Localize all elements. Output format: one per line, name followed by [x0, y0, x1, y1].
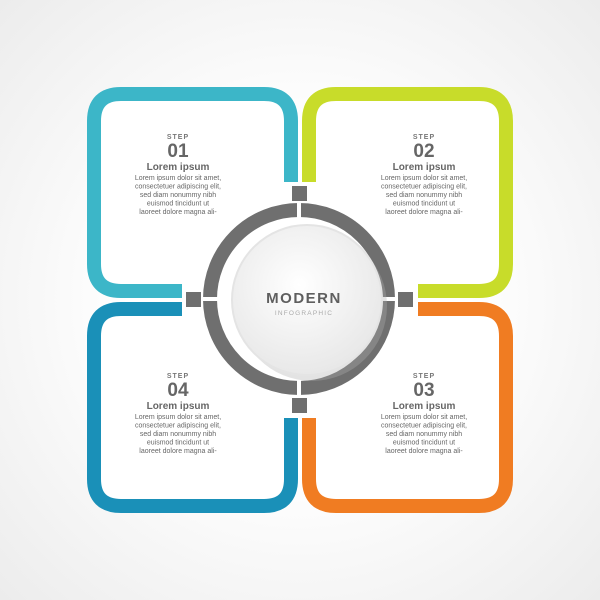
panel: step 01: Lorem ipsum: [147, 162, 209, 173]
panel: step 02: euismod tincidunt ut: [393, 200, 455, 208]
panel: step 04: Lorem ipsum dolor sit amet,: [135, 414, 221, 421]
panel: step 03: sed diam nonummy nibh: [386, 431, 462, 438]
panel: step 01: sed diam nonummy nibh: [140, 192, 216, 199]
panel: step 04: 04: [167, 380, 189, 401]
panel: step 01: [87, 87, 298, 298]
center circle: MODERN: [266, 290, 342, 307]
panel: step 04: euismod tincidunt ut: [147, 440, 209, 446]
panel: step 01: 01: [167, 141, 189, 162]
panel: step 01: STEP: [167, 134, 189, 141]
panel: step 04: consectetuer adipiscing elit,: [135, 422, 221, 430]
panel: step 02: STEP: [413, 134, 435, 141]
center circle: [232, 225, 387, 381]
panel: step 03: laoreet dolore magna ali-: [385, 448, 463, 455]
panel: step 02: Lorem ipsum: [393, 162, 455, 173]
panel: step 02: 02: [413, 141, 435, 162]
panel: step 02: Lorem ipsum dolor sit amet,: [381, 175, 467, 182]
panel: step 04: sed diam nonummy nibh: [140, 431, 216, 438]
panel: step 03: euismod tincidunt ut: [393, 440, 455, 446]
panel: step 03: 03: [413, 380, 435, 401]
panel: step 02: consectetuer adipiscing elit,: [381, 184, 467, 190]
panel: step 02: laoreet dolore magna ali-: [385, 209, 463, 216]
center circle: INFOGRAPHIC: [275, 310, 333, 317]
panel: step 03: Lorem ipsum dolor sit amet,: [381, 414, 467, 421]
panel: step 04: Lorem ipsum: [147, 401, 209, 412]
panel: step 02: sed diam nonummy nibh: [386, 192, 462, 199]
panel: step 04: STEP: [167, 373, 189, 380]
panel: step 04: [87, 302, 298, 513]
gray ring with tabs: [186, 186, 413, 413]
panel: step 01: Lorem ipsum dolor sit amet,: [135, 175, 221, 182]
panel: step 03: Lorem ipsum: [393, 401, 455, 412]
panel: step 03: consectetuer adipiscing elit,: [381, 422, 467, 430]
panel: step 03: STEP: [413, 373, 435, 380]
panel: step 04: laoreet dolore magna ali-: [139, 448, 217, 455]
panel: step 01: laoreet dolore magna ali-: [139, 209, 217, 216]
panel: step 02: [302, 87, 513, 298]
panel: step 03: [302, 302, 513, 513]
panel: step 01: consectetuer adipiscing elit,: [135, 184, 221, 190]
panel: step 01: euismod tincidunt ut: [147, 200, 209, 208]
